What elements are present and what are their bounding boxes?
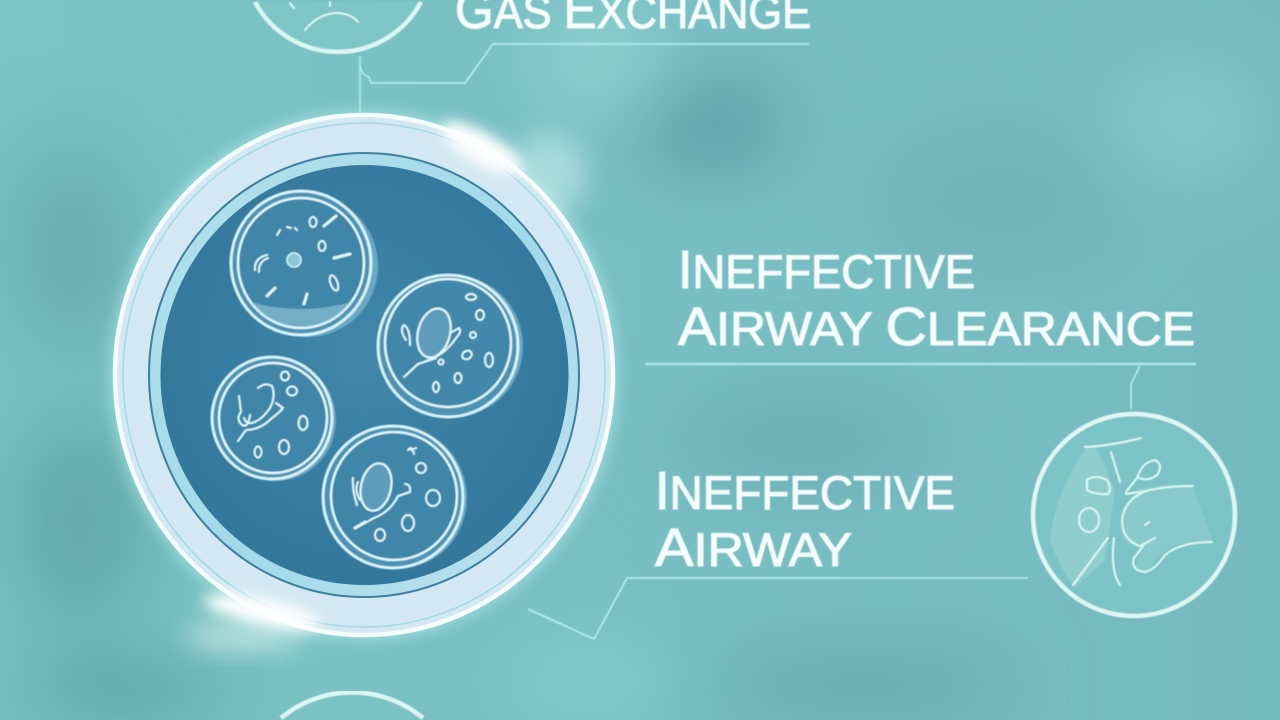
connector: top vertical with branch to Gas Exchange rule (360, 44, 809, 112)
dish rim (115, 115, 613, 635)
dish 4 (323, 426, 467, 568)
dish 2 (378, 275, 523, 417)
outer glow (110, 110, 618, 640)
inner ring (148, 152, 580, 598)
connector: rule under Ineffective Airway (528, 578, 1028, 639)
heading: Ineffective Airway (655, 461, 955, 578)
connector: rule under Ineffective Airway Clearance (645, 364, 1196, 409)
highlight flare: upper right (435, 112, 529, 184)
flare glow: lower left (185, 622, 305, 650)
highlight flare: lower left (201, 587, 323, 637)
dark well (160, 165, 568, 585)
icon: right circle with lung and airway sketch (1033, 414, 1235, 616)
flare glow: upper right (510, 133, 586, 217)
heading: Ineffective Airway Clearance: AIRWAY CLEARANCE (678, 297, 1195, 357)
heading: Ineffective Airway: INEFFECTIVE (655, 461, 955, 521)
heading: Ineffective Airway: AIRWAY (655, 518, 852, 578)
heading: Ineffective Airway Clearance: INEFFECTIVE (678, 240, 975, 300)
dish 1 (231, 191, 378, 337)
dish 3 (212, 357, 336, 481)
main petri dish (110, 110, 618, 650)
connector: bottom vertical (363, 640, 365, 688)
icon: bottom circle (cropped) (281, 692, 423, 718)
heading: Ineffective Airway Clearance (678, 240, 1195, 357)
icon: top circle (cropped) (255, 2, 421, 52)
